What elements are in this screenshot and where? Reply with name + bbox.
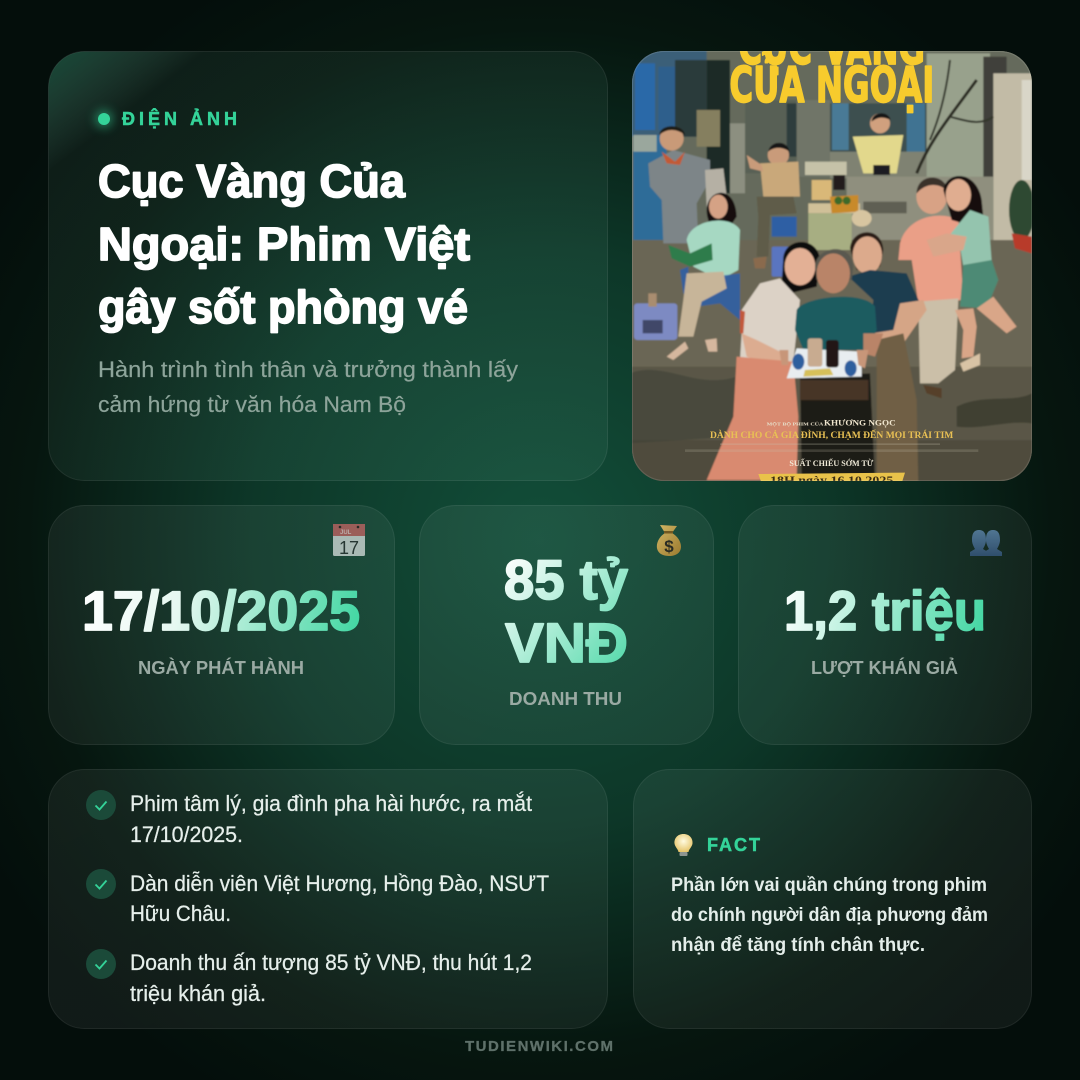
title: Ngoại: Phim Việt xyxy=(98,218,470,270)
poster credits xyxy=(685,419,978,487)
stools and cup xyxy=(634,303,677,340)
fact text xyxy=(671,875,988,956)
bullet 1: 17/10/2025. xyxy=(130,822,243,847)
bullet 1: Phim tâm lý, gia đình pha hài hước, ra mắt xyxy=(130,791,532,816)
bullet 3: triệu khán giả. xyxy=(130,981,266,1006)
bullet 1 xyxy=(86,790,532,847)
bullet 2: Hữu Châu. xyxy=(130,901,231,926)
title xyxy=(98,155,470,333)
icon: calendar: JUL xyxy=(340,530,352,536)
bullet 2 xyxy=(86,869,549,926)
subtitle xyxy=(98,357,519,417)
woman in cream shirt xyxy=(781,242,820,293)
poster credits: MỘT BỘ PHIM CỦA xyxy=(767,422,825,427)
icon: calendar xyxy=(333,524,365,558)
subtitle: Hành trình tình thân và trưởng thành lấy xyxy=(98,357,519,382)
stat: release date xyxy=(48,506,394,744)
poster credits: KHƯƠNG NGỌC xyxy=(824,419,896,428)
man in tan shirt xyxy=(768,144,789,166)
plant xyxy=(1009,180,1034,240)
panel: headline xyxy=(48,52,608,480)
poster scene xyxy=(630,50,1040,483)
value: 1,2 triệu xyxy=(784,579,986,642)
young woman hugging xyxy=(943,176,983,223)
stat: audience xyxy=(738,506,1032,744)
poster title xyxy=(730,51,932,114)
tray and glasses xyxy=(787,348,862,378)
elder woman in pink xyxy=(916,179,947,214)
title: Cục Vàng Của xyxy=(98,155,405,207)
panel: fact xyxy=(634,770,1032,1028)
bullet 3 xyxy=(86,949,532,1006)
woman in navy xyxy=(850,232,883,270)
icon: people xyxy=(970,530,1002,556)
value: 85 tỷ xyxy=(504,548,628,611)
icon: money bag: $ xyxy=(664,537,674,556)
category tag: ĐIỆN ẢNH xyxy=(122,108,237,129)
woman in mint xyxy=(707,193,737,227)
panel: key points xyxy=(48,770,608,1028)
value xyxy=(504,548,628,674)
fact text: nhận để tăng tính chân thực. xyxy=(671,935,925,956)
elder woman in teal xyxy=(815,249,853,280)
drinks stand xyxy=(805,162,847,175)
man in yellow shirt xyxy=(870,113,890,133)
bullet 2: Dàn diễn viên Việt Hương, Hồng Đào, NSƯT xyxy=(130,871,549,896)
subtitle: cảm hứng từ văn hóa Nam Bộ xyxy=(98,392,406,417)
poster credits: 18H ngày 16.10.2025 xyxy=(770,473,893,487)
icon: money bag xyxy=(657,525,681,556)
bullet 3: Doanh thu ấn tượng 85 tỷ VNĐ, thu hút 1,2 xyxy=(130,950,532,975)
poster credits: DÀNH CHO CẢ GIA ĐÌNH, CHẠM ĐẾN MỌI TRÁI TIM xyxy=(710,430,954,440)
icon: calendar: 17 xyxy=(339,538,359,558)
footer: TUDIENWIKI.COM xyxy=(465,1038,613,1055)
value: 17/10/2025 xyxy=(82,579,360,642)
fact heading: FACT xyxy=(707,835,760,855)
fact text: Phần lớn vai quần chúng trong phim xyxy=(671,875,987,896)
label: LƯỢT KHÁN GIẢ xyxy=(811,657,958,678)
label: DOANH THU xyxy=(509,689,622,709)
value: VNĐ xyxy=(505,611,628,674)
poster title: CỦA NGOẠI xyxy=(729,50,934,114)
man in grey jacket xyxy=(648,150,710,243)
ground xyxy=(632,239,1016,366)
stat: revenue xyxy=(420,506,714,744)
poster title: CỤC VÀNG xyxy=(738,17,925,76)
title: gây sốt phòng vé xyxy=(98,281,468,333)
poster image xyxy=(632,51,1032,481)
poster credits: SUẤT CHIẾU SỚM TỪ xyxy=(789,458,874,468)
label: NGÀY PHÁT HÀNH xyxy=(138,657,304,678)
fact text: do chính người dân địa phương đảm xyxy=(671,905,988,926)
icon: light bulb xyxy=(674,834,693,856)
